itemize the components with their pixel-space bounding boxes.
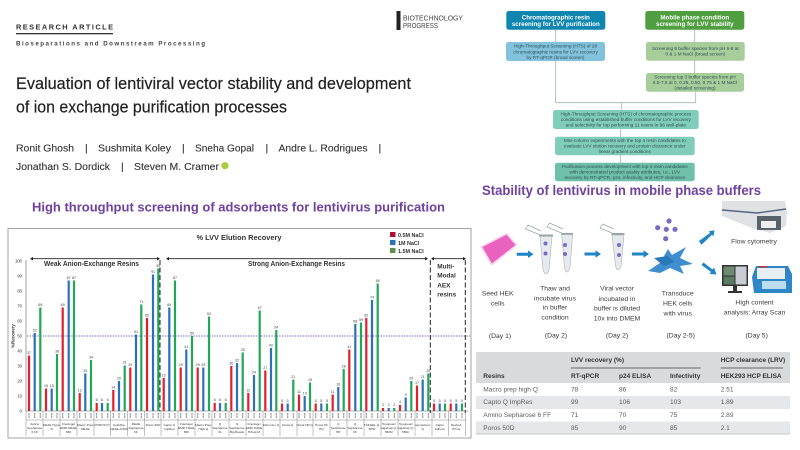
box: buffer species screening (646, 42, 745, 61)
y axis: 90 (17, 274, 23, 278)
box: detailed buffer screening: 6.5-7.5 at 0, 0.25, 0.50, 0.75 & 1 M NaCl (653, 80, 737, 85)
bars and value labels: 5 (315, 399, 317, 403)
bars and value labels: 16 (336, 382, 340, 386)
article header label (16, 22, 205, 48)
bars and value labels: 25 (83, 369, 87, 373)
bars and value labels: 24 (252, 370, 256, 374)
resin name labels (27, 422, 463, 434)
arrow: thaw to dilution (584, 250, 601, 258)
section labels: AEX (437, 282, 451, 289)
bars and value labels: 50 (190, 332, 194, 336)
step label: thaw: condition (541, 314, 569, 322)
salt concentration tick marks (29, 413, 462, 418)
bars and value labels: 11 (331, 390, 335, 394)
row: Amino Sepharose 6 FF: 2.89 (721, 412, 734, 419)
bars and value labels: 29 (196, 363, 200, 367)
bars and value labels: 38 (55, 350, 59, 354)
step label: viral vector (594, 286, 641, 322)
bars and value labels: 5 (444, 399, 446, 403)
box: purification process development: Purification process development with top 4 resin candidates (562, 164, 688, 169)
row: Amino Sepharose 6 FF: 71 (571, 412, 579, 419)
bars and value labels: 69 (38, 303, 42, 307)
resin name labels: Nuvia Q (282, 423, 294, 427)
row: Capto Q ImpRes: 99 (571, 399, 579, 406)
y axis: 100 (15, 258, 23, 264)
authors (16, 143, 381, 173)
box: HTS of resins: by RT-qPCR (broad screen) (526, 55, 585, 60)
resin name labels: Macro Prep (195, 423, 212, 427)
bars and value labels: 69 (167, 303, 171, 307)
resin name labels: Q (236, 422, 239, 426)
bars and value labels: 5 (450, 399, 452, 403)
bars and value labels: 15 (50, 384, 54, 388)
resin name labels: Nuvia A (451, 423, 463, 427)
step label: thaw (534, 285, 577, 322)
resin name labels: Q (354, 422, 357, 426)
label: high content analysis: High content (735, 300, 774, 306)
resin name labels: Fractogel (248, 422, 261, 426)
resin name labels: Toyopearl (399, 422, 413, 426)
authors: Jonathan S. Dordick (16, 161, 111, 173)
icon: array scan instrument (722, 265, 792, 293)
resin name labels: HiCap M (248, 430, 260, 434)
icon: virus particles (655, 218, 678, 241)
bars and value labels (27, 264, 463, 411)
row: Poros 50D: Poros 50D (483, 425, 515, 432)
table header: p24 ELISA (619, 373, 651, 380)
bars and value labels: 39 (241, 348, 245, 352)
resin name labels: Sepharose (348, 426, 363, 430)
section labels: Modal (437, 273, 456, 280)
box: mini-column experiments: evaluate LVV elution recovery and protein clearance under (564, 144, 686, 148)
icon: HEK cells (648, 247, 693, 274)
step label: viral vector: 10x into DMEM (594, 316, 641, 322)
authors: | (85, 143, 88, 155)
resin name labels: FF (353, 430, 357, 434)
authors: | (266, 143, 268, 155)
resin name labels: POROS PI (95, 423, 110, 427)
box: purification process development: recovery by RT-qPCR, p24, infectivity, and HCP clearance (564, 175, 686, 180)
day labels: (Day 2) (606, 332, 628, 340)
bars and value labels: 22 (162, 374, 166, 378)
step label: transduce: with virus (663, 310, 692, 317)
resin name labels: 650M (385, 430, 393, 434)
step label: thaw: in buffer (543, 305, 568, 312)
bars and value labels: 31 (123, 360, 127, 364)
journal logo: PROGRESS (403, 21, 438, 30)
arrow: dilution to transduction (632, 250, 649, 258)
box: purification process development (555, 163, 695, 181)
y axis: 20 (17, 378, 23, 384)
resin name labels: 6 FF (32, 430, 38, 434)
box: detailed buffer screening: Screening top 3 buffer species from pH (654, 74, 736, 80)
resin name labels: DEAE (81, 427, 90, 431)
y axis: 70 (17, 304, 23, 308)
step label: thaw: incubate virus (534, 295, 577, 302)
resin name labels: GigaCap Q- (380, 426, 397, 430)
legend: 1.5M NaCl (398, 249, 424, 255)
box: mini-column experiments (555, 137, 695, 155)
section labels: Multi- (437, 263, 454, 270)
resin name labels: GigaCap Q- (397, 426, 414, 430)
step label: seed (482, 290, 514, 308)
box: HTS of process conditions (553, 110, 699, 129)
chart title: % LVV Elution Recovery (196, 233, 282, 242)
article header label: Bioseparations and Downstream Processing (16, 41, 205, 48)
y axis: 60 (17, 318, 23, 324)
step label: seed: Seed HEK (482, 290, 514, 298)
bars and value labels: 5 (326, 399, 328, 403)
day labels: (Day 2-5) (667, 332, 695, 340)
legend (390, 232, 424, 255)
resin name labels: Adhere (435, 427, 445, 431)
icon: tube 1 (526, 225, 553, 274)
bars and value labels: 63 (207, 312, 211, 316)
step label: transduce: HEK cells (663, 300, 693, 308)
bars and value labels: 29 (201, 363, 205, 367)
bars and value labels: 67 (258, 306, 262, 310)
step label: seed: cells (491, 300, 505, 308)
step label: viral vector: Viral vector (600, 286, 635, 293)
heading: stability of lentivirus: Stability of lentivirus in mobile phase buffers (482, 183, 761, 198)
box: HTS of process conditions: and selectivity for top performing 11 resins in 96 well-plate (566, 123, 686, 128)
resin name labels: Sepharose (230, 426, 245, 430)
section labels: Weak Anion-Exchange Resins (44, 259, 139, 268)
50 percent threshold line (27, 335, 470, 337)
resin name labels: Poros 50 (315, 423, 328, 427)
resin name labels: Amino (30, 422, 39, 426)
table header: RT-qPCR (571, 373, 599, 380)
resin name labels: 650 (184, 430, 189, 434)
bars and value labels: 32 (235, 358, 239, 362)
table header (483, 357, 785, 380)
bars and value labels: 87 (72, 276, 76, 280)
row: Macro prep high Q: 86 (619, 386, 627, 393)
table header: HEK293 HCP ELISA (721, 373, 782, 380)
section arrows and dividers (30, 257, 466, 413)
resin name labels: EMD DEAE (60, 426, 77, 430)
resin name labels: 550C (402, 430, 410, 434)
arrow: to array scan (702, 262, 716, 274)
day labels (489, 332, 768, 340)
resin name labels: Fractogel (62, 422, 75, 426)
bars and value labels: 27 (263, 366, 267, 370)
bars and value labels: 19 (308, 378, 312, 382)
bars and value labels: 52 (33, 328, 37, 332)
paper title: of ion exchange purification processes (16, 98, 287, 116)
authors: Sneha Gopal (195, 143, 254, 155)
row: Poros 50D: 90 (619, 425, 627, 432)
box: HTS of process conditions: conditions using established buffer conditions for LVV recovery (561, 117, 692, 122)
authors: Andre L. Rodrigues (278, 143, 368, 155)
authors: Steven M. Cramer (134, 161, 219, 173)
panel: stability assay workflow (480, 201, 792, 340)
resin name labels: High Q (198, 427, 209, 431)
bars and value labels: 30 (229, 362, 233, 366)
resin name labels: ImpRes (164, 427, 175, 431)
resin name labels: DEAE Hyper (43, 423, 60, 427)
bars and value labels: 2 (388, 403, 390, 407)
box: chromatographic resin screening: screening for LVV purification (512, 21, 600, 28)
y axis: 30 (17, 364, 23, 368)
bars and value labels: 6 (101, 398, 103, 402)
row: Poros 50D: 85 (571, 425, 579, 432)
bars and value labels: 4 (399, 400, 401, 404)
step label: transduce (662, 291, 694, 317)
resin name labels: 650 (66, 430, 71, 434)
x axis group table (26, 411, 466, 436)
article header label: RESEARCH ARTICLE (16, 22, 113, 31)
bars and value labels: 87 (173, 276, 177, 280)
bars and value labels: 25 (426, 369, 430, 373)
step label: transduce: Transduce (662, 291, 694, 298)
resin name labels: Q (337, 422, 340, 426)
bars and value labels: 9 (405, 393, 407, 397)
bars and value labels: 20 (409, 376, 413, 380)
bars and value labels: 87 (67, 276, 71, 280)
resin name labels: XL (218, 430, 222, 434)
box: HTS of process conditions: High-Throughput Screening (HTS) of chromatographic process (561, 112, 692, 116)
resin name labels: 5PW (369, 427, 375, 431)
resin name labels: Sepharose (27, 426, 42, 430)
resin name labels: EMD TMAE (178, 426, 194, 430)
resin name labels: EMD TMAE (246, 426, 262, 430)
resin name labels: D (51, 427, 54, 431)
resin name labels: DEAE A-500 (110, 427, 128, 431)
table header: Resins (483, 373, 505, 380)
bars and value labels: 5 (461, 399, 463, 403)
row: Amino Sepharose 6 FF: Amino Sepharose 6 FF (483, 412, 551, 419)
y axis: 50 (17, 334, 23, 338)
row: Poros 50D (483, 425, 730, 432)
table header: LVV recovery (%) (571, 357, 624, 364)
section labels: Strong Anion-Exchange Resins (248, 259, 345, 268)
bars and value labels: 6 (219, 398, 221, 402)
row: Capto Q ImpRes: 103 (670, 399, 681, 406)
bars and value labels: 5 (455, 399, 457, 403)
results table (476, 352, 790, 434)
box: purification process development: with demonstrated product quality attributes, i.e., LVV (569, 170, 681, 174)
box: chromatographic resin screening: Chromatographic resin (522, 14, 590, 21)
y axis: 80 (17, 288, 23, 294)
resin name labels: Capto Q (164, 423, 176, 427)
icon: tube 3 (600, 224, 624, 270)
panel: bar chart of LVV elution recovery (8, 228, 471, 438)
row: Macro prep high Q: Macro prep high Q (483, 386, 538, 393)
resin name labels: Q (219, 422, 222, 426)
resin name labels: TSKGEL Q- (364, 423, 380, 427)
day labels: (Day 5) (746, 332, 768, 340)
bars and value labels: 41 (184, 345, 188, 349)
bars and value labels: 5 (433, 399, 435, 403)
bars and value labels: 69 (61, 303, 65, 307)
row: Amino Sepharose 6 FF: 70 (619, 412, 627, 419)
resin name labels: Fractogel (180, 422, 193, 426)
label: flow cytometry: Flow cytometry (731, 238, 777, 246)
box: HTS of resins: chromatographic resins for LVV recovery (513, 49, 598, 54)
table header: HCP clearance (LRV) (721, 357, 785, 364)
bars and value labels: 34 (89, 356, 93, 360)
table header: Infectivity (670, 373, 701, 380)
bars and value labels: 29 (128, 363, 132, 367)
row: Poros 50D: 2.1 (721, 425, 730, 432)
flowchart connectors (556, 30, 696, 163)
row: Macro prep high Q: 78 (571, 386, 579, 393)
icon: well plate (480, 233, 518, 266)
bars and value labels: 21 (421, 375, 425, 379)
box: mobile phase condition screening: screening for LVV stability (656, 21, 734, 28)
flowchart: screening workflow (506, 11, 745, 181)
bars and value labels: 59 (359, 318, 363, 322)
resin name labels: Macro Prep (77, 423, 94, 427)
bars and value labels: 74 (370, 296, 374, 300)
legend: 1M NaCl (398, 241, 420, 247)
box: HTS of resins: High-Throughput Screening (HTS) of 28 (514, 44, 597, 49)
label: high content analysis: analysis: Array Scan (724, 310, 786, 316)
bars and value labels: 11 (297, 390, 301, 394)
bars and value labels: 12 (78, 388, 82, 392)
resin name labels: Big Beads (230, 430, 245, 434)
legend: 0.5M NaCl (398, 233, 424, 239)
section labels: resins (437, 292, 457, 299)
bars and value labels: 5 (439, 399, 441, 403)
y axis: 10 (17, 394, 23, 398)
bars and value labels: 71 (139, 300, 143, 304)
bars and value labels: 41 (347, 345, 351, 349)
resin name labels: Prime (452, 427, 461, 431)
row: Capto Q ImpRes (483, 399, 734, 406)
authors: Ronit Ghosh (16, 143, 74, 155)
arrow: seed to thaw (517, 250, 534, 258)
resin name labels: Sepharose (129, 426, 144, 430)
row: Capto Q ImpRes: Capto Q ImpRes (483, 399, 533, 406)
resin name labels: Ionosphere (415, 423, 431, 427)
bars and value labels: 6 (214, 398, 216, 402)
resin name labels: Sepharose (213, 426, 228, 430)
section labels (44, 259, 457, 299)
bars and value labels: 2 (382, 403, 384, 407)
bars and value labels: 29 (179, 363, 183, 367)
icon: tube 2 (547, 223, 573, 272)
box: detailed buffer screening (646, 73, 744, 92)
box: mini-column experiments: linear gradient conditions (599, 149, 652, 154)
bars and value labels: 95 (156, 264, 160, 268)
bars and value labels: 2 (393, 403, 395, 407)
step label: viral vector: incubated in (599, 296, 636, 303)
box: mini-column experiments: Mini-column experiments with the top 4 resin candidates to (564, 138, 686, 143)
box: detailed buffer screening: (detailed screening) (674, 86, 716, 90)
bars and value labels: 5 (320, 399, 322, 403)
resin name labels: FF (134, 430, 138, 434)
y axis: %Recovery (10, 324, 16, 348)
y axis: 40 (17, 348, 23, 354)
box: buffer species screening: 0 & 1 M NaCl (broad screen) (665, 52, 726, 56)
row: Capto Q ImpRes: 1.89 (721, 399, 734, 406)
row: Capto Q ImpRes: 106 (619, 399, 630, 406)
arrow: to flow cytometry (699, 230, 714, 245)
bars and value labels: 6 (225, 398, 227, 402)
row: Macro prep high Q: 82 (670, 386, 678, 393)
paper title: Evaluation of lentiviral vector stability and development (16, 75, 411, 93)
icon: flow cytometer (722, 201, 787, 233)
authors: Sushmita Koley (98, 143, 172, 155)
bars and value labels: 14 (111, 386, 115, 390)
bars and value labels: 91 (151, 270, 155, 274)
row: Amino Sepharose 6 FF (483, 412, 734, 419)
resin name labels: Eshmuno Q (263, 423, 280, 427)
y axis: 0 (20, 408, 23, 414)
day labels: (Day 2) (545, 332, 567, 340)
bars and value labels: 62 (145, 314, 149, 318)
bars and value labels: 85 (376, 279, 380, 283)
bars and value labels: 58 (353, 320, 357, 324)
bars and value labels: 37 (27, 351, 31, 355)
bars and value labels: 5 (281, 399, 283, 403)
bars and value labels: 6 (96, 398, 98, 402)
row: Amino Sepharose 6 FF: 75 (670, 412, 678, 419)
bars and value labels: 28 (342, 364, 346, 368)
authors: | (378, 143, 381, 155)
step label: viral vector: buffer is diluted (594, 306, 640, 313)
y axis (10, 258, 468, 414)
resin name labels: Q (421, 427, 424, 431)
row: Macro prep high Q: 2.51 (721, 386, 734, 393)
box: mobile phase condition screening: Mobile phase condition (660, 14, 729, 21)
resin name labels: HQ (319, 427, 324, 431)
label: high content analysis (724, 300, 786, 316)
box: buffer species screening: Screening 9 buffer species from pH 6-8 at (652, 46, 739, 51)
heading: high throughput screening: High throughput screening of adsorbents for lentivirus purification (32, 200, 445, 215)
bars and value labels: 51 (134, 330, 138, 334)
bars and value labels: 42 (269, 344, 273, 348)
resin name labels: HP (336, 430, 340, 434)
bars and value labels: 17 (415, 381, 419, 385)
journal logo: BIOTECHNOLOGY (403, 14, 463, 22)
bars and value labels: 54 (274, 326, 278, 330)
bars and value labels: 20 (117, 376, 121, 380)
paper title (16, 75, 411, 116)
resin name labels: DEAE (132, 422, 140, 426)
bars and value labels: 12 (246, 388, 250, 392)
bars and value labels: 21 (291, 375, 295, 379)
authors: | (182, 143, 185, 155)
resin name labels: Nuvia HR Q (296, 423, 314, 427)
journal logo (396, 11, 463, 30)
box: HTS of resins (506, 42, 605, 61)
authors: | (121, 161, 124, 173)
resin name labels: Poros 50D (146, 423, 161, 427)
row: Poros 50D: 85 (670, 425, 678, 432)
resin name labels: Cellufine (113, 423, 125, 427)
bars and value labels: 15 (44, 384, 48, 388)
bars and value labels: 62 (364, 314, 368, 318)
box: chromatographic resin screening (506, 11, 605, 30)
box: mobile phase condition screening (645, 11, 744, 30)
resin name labels: Sepharose (331, 426, 346, 430)
row: Macro prep high Q (483, 386, 734, 393)
step label: thaw: Thaw and (540, 285, 570, 292)
day labels: (Day 1) (489, 333, 511, 340)
bars and value labels: 10 (303, 392, 307, 396)
resin name labels: Toyopearl (382, 422, 396, 426)
bars and value labels: 6 (107, 398, 109, 402)
resin name labels: Capto (436, 423, 444, 427)
bars and value labels: 5 (287, 399, 289, 403)
